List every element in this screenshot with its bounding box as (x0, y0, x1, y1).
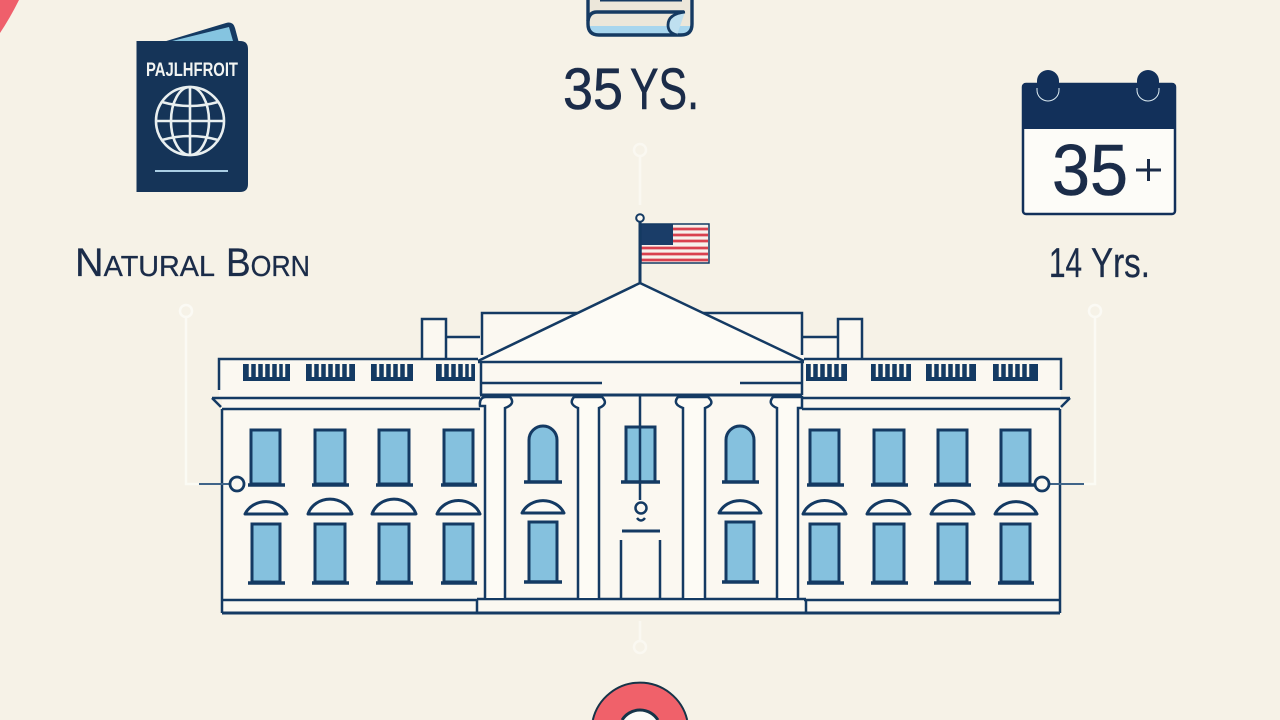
arched window hoods (245, 499, 1037, 514)
age label: 35 YS.: 35 (563, 57, 623, 122)
passport icon (136, 23, 248, 192)
passport globe (156, 87, 224, 155)
central door and lantern (621, 395, 660, 598)
scroll icon (588, 0, 692, 35)
faint connector: top (634, 144, 646, 205)
portico linework (477, 283, 806, 613)
left connector node (199, 477, 244, 491)
residency label: 14 Yrs.: Yrs. (1091, 239, 1150, 286)
residency label: 14 Yrs. (1049, 239, 1150, 286)
eligibility label: Natural Born: BORN (226, 241, 310, 285)
White House illustration (199, 283, 1084, 613)
red corner shape (0, 0, 19, 33)
residency label: 14 Yrs.: 14 (1049, 239, 1082, 286)
eligibility label: Natural Born: NATURAL (75, 241, 215, 285)
faint connector: right (1084, 305, 1101, 484)
faint connector: left (180, 305, 199, 484)
faint connector: bottom (634, 621, 646, 653)
right connector node (1035, 477, 1084, 491)
columns (480, 397, 802, 598)
balustrade blocks (243, 364, 1038, 381)
building fill (219, 283, 1061, 613)
eligibility label: Natural Born (75, 241, 310, 285)
calendar number: 35 (1052, 131, 1128, 211)
lower windows (252, 522, 1030, 582)
balustrade gaps (250, 364, 1028, 377)
calendar icon (1022, 70, 1176, 214)
wing and roof linework (212, 319, 1070, 613)
red location ring (593, 683, 687, 720)
window sills (248, 482, 1034, 583)
calendar plus sign (1136, 159, 1161, 181)
upper windows (251, 426, 1030, 484)
age label: 35 YS.: YS. (630, 57, 699, 122)
American flag (636, 214, 709, 284)
passport label: PAJLHFROIT (146, 60, 238, 81)
age label: 35 YS. (563, 57, 699, 122)
